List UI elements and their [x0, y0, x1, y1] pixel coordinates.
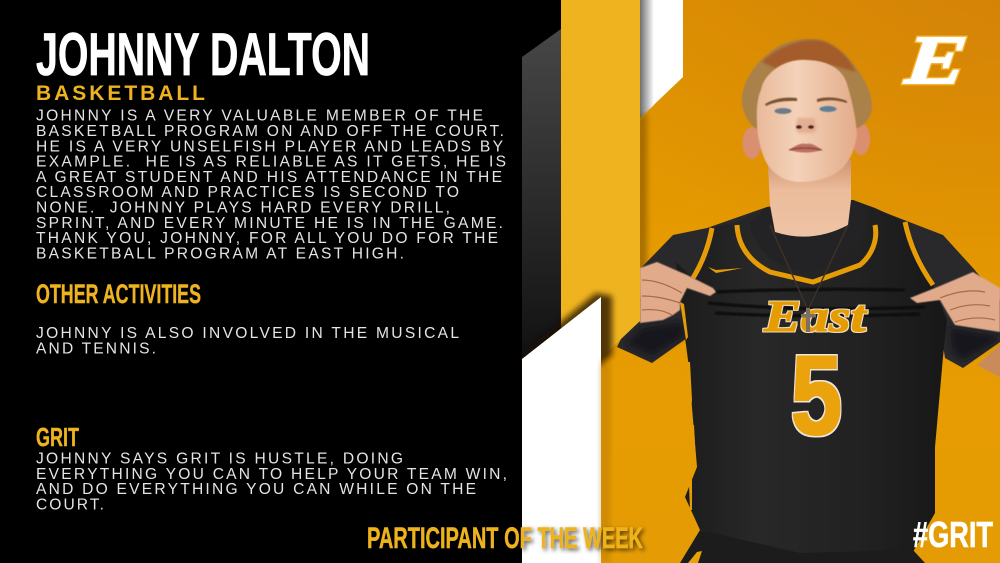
text block: other activities: JOHNNY IS ALSO INVOLVED IN THE MUSICAL	[36, 325, 459, 342]
shape: white top chevron	[640, 0, 683, 118]
necklace	[770, 225, 848, 310]
shape: dark grey chevron	[522, 29, 561, 359]
text block: player description	[36, 108, 506, 262]
text block: grit definition: COURT.	[36, 496, 104, 513]
shoulder trim	[693, 222, 933, 285]
subtitle: sport: BASKETBALL	[36, 82, 205, 105]
text block: player description: SPRINT, AND EVERY MINUTE HE IS IN THE GAME.	[36, 215, 503, 232]
cross pendant	[801, 308, 816, 332]
sleeves	[617, 200, 1000, 368]
text block: player description: A GREAT STUDENT AND HIS ATTENDANCE IN THE	[36, 169, 502, 186]
text block: grit definition: AND DO EVERYTHING YOU CAN WHILE ON THE	[36, 481, 476, 498]
panel: black text background	[0, 0, 561, 563]
text block: player description: NONE. JOHNNY PLAYS HARD EVERY DRILL,	[36, 200, 450, 216]
heading: grit: GRIT	[36, 422, 79, 452]
text block: other activities: AND TENNIS.	[36, 340, 156, 358]
undershirt	[750, 200, 868, 272]
sleeve shading	[626, 322, 998, 360]
text block: other activities	[36, 325, 459, 358]
shape: shadow cast by white chevron	[522, 293, 612, 372]
footer label: participant of the week: PARTICIPANT OF THE WEEK	[367, 522, 643, 555]
text block: grit definition	[36, 450, 507, 513]
left hand	[640, 262, 716, 323]
text block: grit definition: JOHNNY SAYS GRIT IS HUSTLE, DOING	[36, 450, 403, 468]
text block: player description: HE IS A VERY UNSELFISH PLAYER AND LEADS BY	[36, 138, 504, 155]
hair top	[762, 40, 856, 72]
title: player name: JOHNNY DALTON	[36, 21, 370, 88]
jersey number: 5	[791, 332, 842, 458]
jersey body	[676, 200, 947, 556]
panel: orange photo backdrop	[560, 0, 1000, 563]
figure: player photo	[617, 39, 1000, 563]
jersey swoosh	[708, 267, 743, 273]
text block: player description: CLASSROOM AND PRACTICES IS SECOND TO	[36, 184, 459, 201]
side trim	[680, 302, 696, 510]
jersey chest creases	[708, 289, 925, 316]
text block: player description: BASKETBALL PROGRAM ON AND OFF THE COURT.	[36, 123, 504, 140]
jersey wordmark: East	[763, 292, 868, 341]
text block: player description: JOHNNY IS A VERY VALUABLE MEMBER OF THE	[36, 108, 483, 125]
logo: East E: E	[897, 24, 977, 99]
text block: grit definition: EVERYTHING YOU CAN TO HELP YOUR TEAM WIN,	[36, 466, 507, 483]
neck	[768, 160, 851, 237]
heading: other activities: OTHER ACTIVITIES	[36, 279, 201, 309]
facial features	[765, 97, 847, 152]
shape: shadow beside white chevron	[601, 362, 609, 563]
collar trim	[737, 225, 876, 282]
text block: player description: EXAMPLE. HE IS AS RELIABLE AS IT GETS, HE IS	[36, 154, 506, 171]
shape: gold band shadow	[601, 112, 647, 345]
text block: player description: BASKETBALL PROGRAM AT EAST HIGH.	[36, 245, 404, 262]
right forearm	[977, 345, 1000, 377]
text block: player description: THANK YOU, JOHNNY, FOR ALL YOU DO FOR THE	[36, 230, 498, 247]
shape: white lower chevron	[522, 297, 601, 563]
ears	[742, 123, 870, 159]
right hand	[910, 272, 1000, 332]
face	[757, 60, 857, 182]
shape: gold vertical band	[561, 0, 640, 358]
shorts	[680, 530, 925, 563]
hair	[742, 39, 872, 128]
